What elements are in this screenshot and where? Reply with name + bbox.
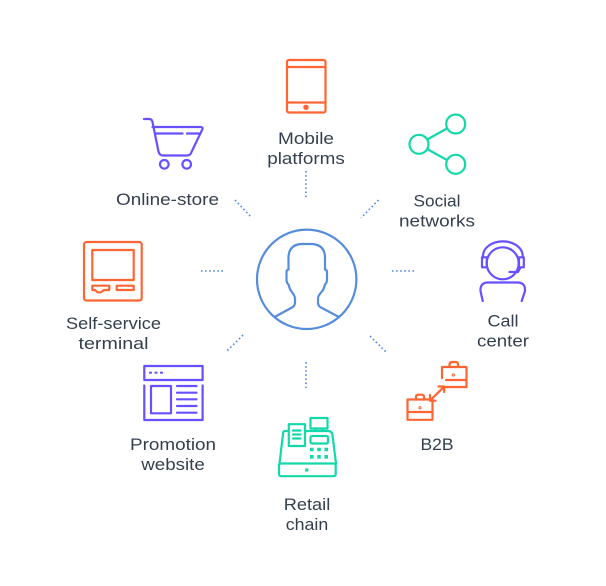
item: mobile platforms [267,60,345,168]
item: call center [477,241,529,350]
icon: terminal kiosk [84,242,142,300]
label: mobile platforms: platforms [267,149,345,168]
item: retail chain [279,418,336,534]
label: b2b: B2B [420,435,454,454]
icon: tablet [287,60,326,112]
icon: two briefcases with arrow [408,362,466,420]
dotted connectors [200,171,414,388]
icon: web page layout [144,366,203,420]
item: b2b [408,362,466,454]
label: mobile platforms [267,129,345,168]
label: social networks: Social [414,192,460,210]
label: self-service terminal: Self-service [66,314,161,333]
label: self-service terminal: terminal [78,334,148,353]
label: self-service terminal [66,314,161,353]
icon: central customer avatar [257,230,356,329]
label: retail chain: chain [286,515,328,534]
label: call center: center [477,332,529,350]
item: promotion website [130,366,216,474]
label: promotion website: Promotion [130,435,216,454]
item: self-service terminal [66,242,161,353]
label: call center [477,312,529,350]
label: retail chain: Retail [284,495,330,514]
label: social networks [399,192,475,230]
icon: headset agent [480,241,525,301]
label: promotion website: website [140,455,205,474]
item: online-store [116,119,219,209]
item: social networks [399,114,475,230]
label: social networks: networks [399,212,475,230]
icon: cash register [279,418,336,476]
label: online-store: Online-store [116,190,219,209]
label: call center: Call [488,312,518,330]
icon: share nodes [410,114,465,174]
label: mobile platforms: Mobile [278,129,334,148]
label: promotion website [130,435,216,474]
label: retail chain [284,495,330,534]
icon: shopping cart [144,119,203,169]
